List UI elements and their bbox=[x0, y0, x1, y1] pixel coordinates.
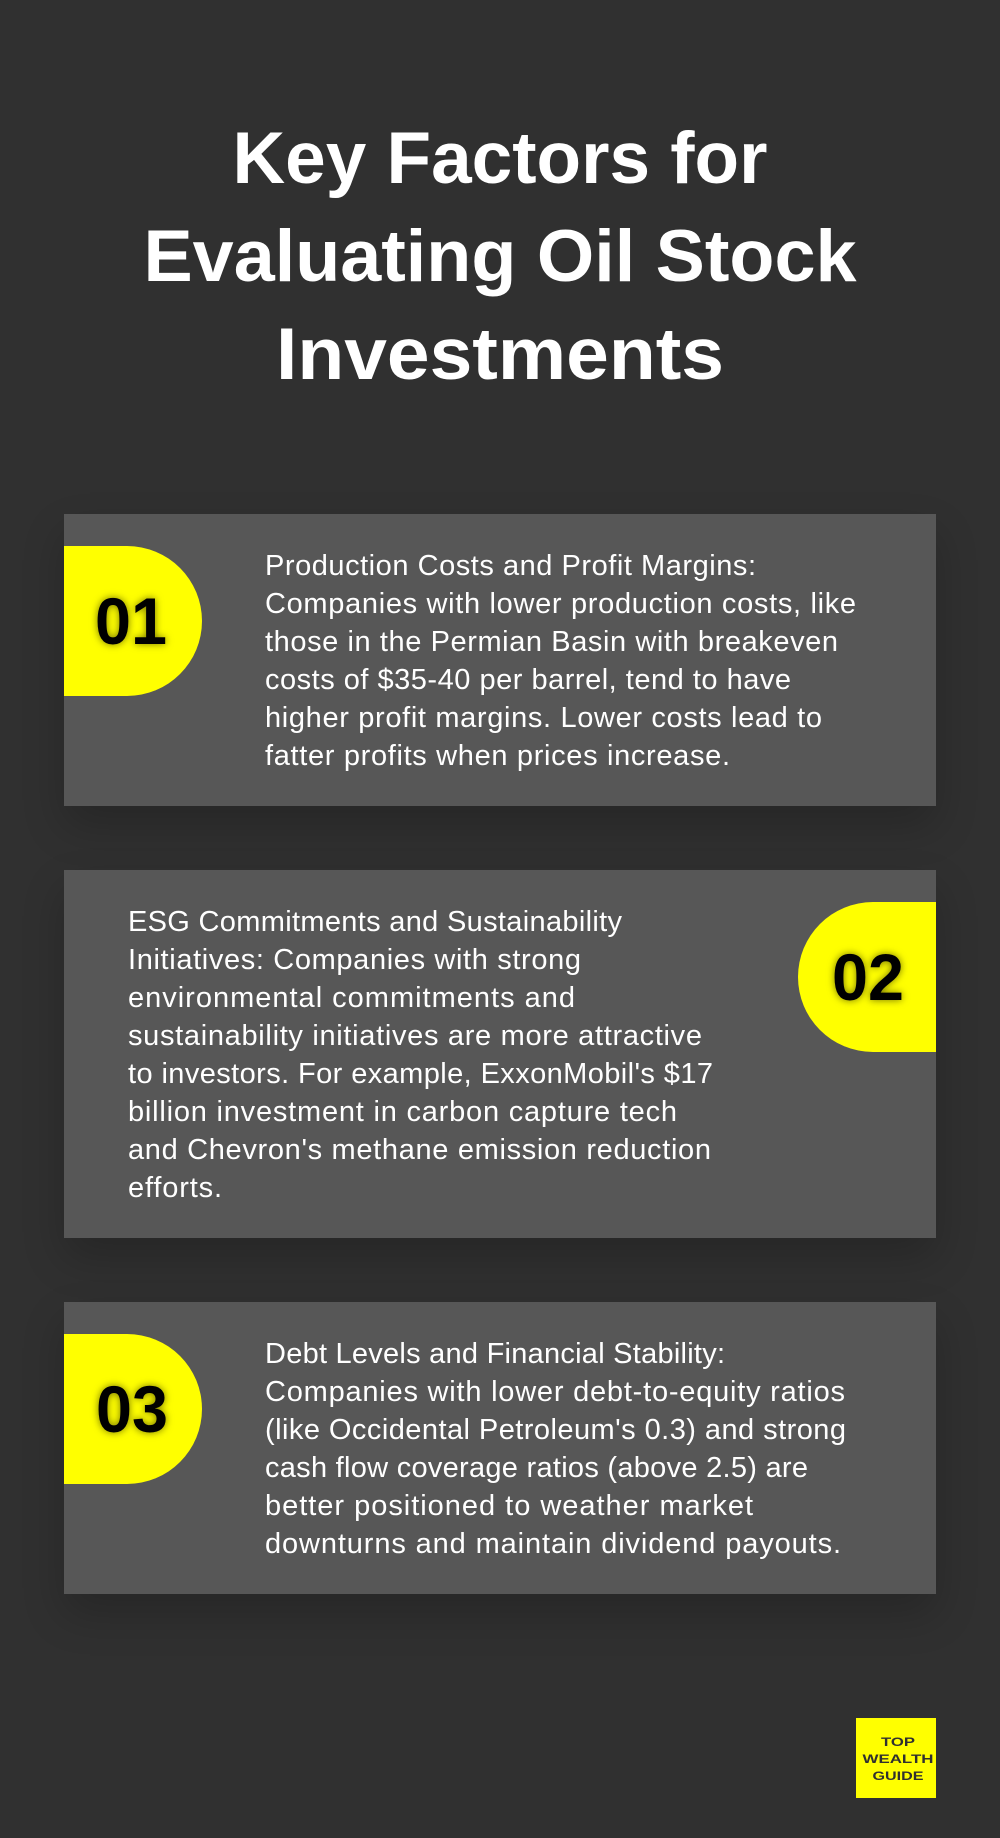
text: debt levels: downturns and maintain dividend payouts. bbox=[265, 1528, 841, 1560]
badge 02 bbox=[798, 902, 936, 1052]
text: ESG commitments: billion investment in carbon capture tech bbox=[128, 1096, 677, 1128]
text: debt levels: cash flow coverage ratios (above 2.5) are bbox=[265, 1452, 808, 1484]
text: ESG commitments: to investors. For example, ExxonMobil's $17 bbox=[128, 1058, 713, 1090]
text: ESG commitments: ESG Commitments and Sustainability bbox=[128, 906, 622, 938]
text: ESG commitments: sustainability initiatives are more attractive bbox=[128, 1020, 702, 1052]
title bbox=[144, 118, 857, 395]
text: production costs: those in the Permian Basin with breakeven bbox=[265, 626, 838, 658]
badge 02: 02 bbox=[832, 940, 904, 1014]
logo: Top Wealth Guide bbox=[856, 1718, 936, 1798]
text: ESG commitments: environmental commitments and bbox=[128, 982, 575, 1014]
text: debt levels: Debt Levels and Financial Stability: bbox=[265, 1338, 725, 1370]
badge 03: 03 bbox=[96, 1372, 168, 1446]
logo: Top Wealth Guide: GUIDE bbox=[872, 1771, 924, 1783]
text: production costs: Production Costs and Profit Margins: bbox=[265, 550, 756, 582]
panel: production costs bbox=[64, 514, 936, 806]
title: Key Factors for bbox=[232, 118, 768, 199]
text: debt levels: (like Occidental Petroleum's 0.3) and strong bbox=[265, 1414, 846, 1446]
badge 03 bbox=[64, 1334, 202, 1484]
text: ESG commitments bbox=[128, 906, 713, 1204]
text: debt levels: Companies with lower debt-to-equity ratios bbox=[265, 1376, 845, 1408]
text: production costs: Companies with lower production costs, like bbox=[265, 588, 856, 620]
text: production costs: fatter profits when prices increase. bbox=[265, 740, 730, 772]
text: production costs bbox=[265, 550, 856, 772]
text: ESG commitments: efforts. bbox=[128, 1172, 222, 1204]
badge 01 bbox=[64, 546, 202, 696]
text: debt levels bbox=[265, 1338, 846, 1560]
panel: ESG commitments bbox=[64, 870, 936, 1238]
panel: debt levels bbox=[64, 1302, 936, 1594]
text: debt levels: better positioned to weather market bbox=[265, 1490, 753, 1522]
text: ESG commitments: and Chevron's methane emission reduction bbox=[128, 1134, 711, 1166]
text: production costs: costs of $35-40 per barrel, tend to have bbox=[265, 664, 791, 696]
badge 01: 01 bbox=[95, 584, 167, 658]
text: ESG commitments: Initiatives: Companies with strong bbox=[128, 944, 581, 976]
logo: Top Wealth Guide: WEALTH bbox=[862, 1754, 934, 1766]
text: production costs: higher profit margins. Lower costs lead to bbox=[265, 702, 822, 734]
title: Investments bbox=[276, 314, 724, 395]
logo: Top Wealth Guide: TOP bbox=[881, 1737, 915, 1749]
title: Evaluating Oil Stock bbox=[144, 216, 857, 297]
